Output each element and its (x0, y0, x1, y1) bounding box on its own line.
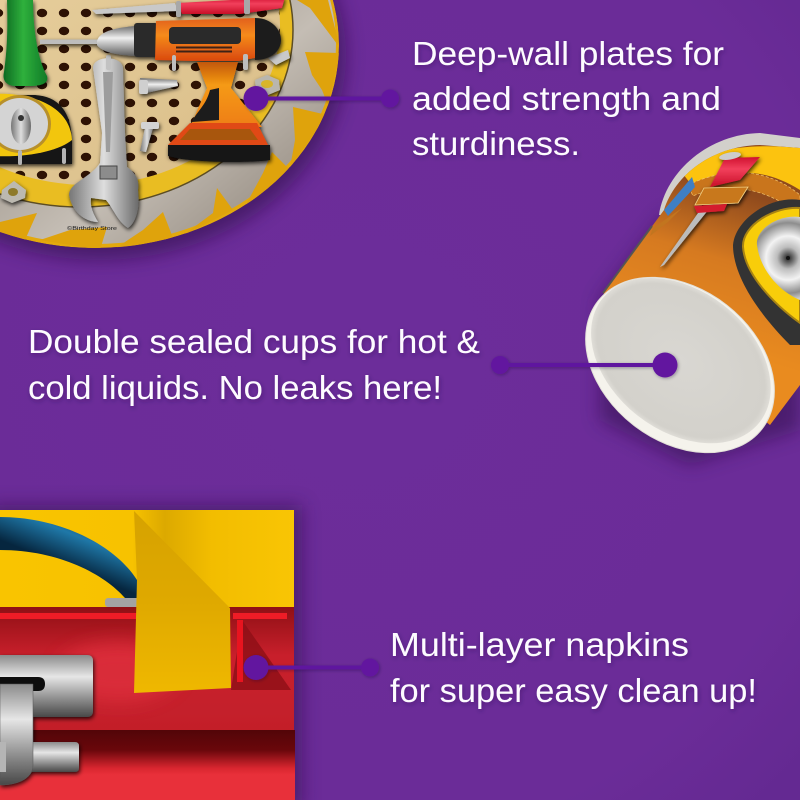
text: napkins feature: Multi-layer napkins (390, 626, 689, 663)
dark tape case (733, 199, 800, 345)
cup body (600, 130, 800, 430)
napkin folded corner (134, 511, 231, 693)
text: cups feature: cold liquids. No leaks here! (28, 369, 442, 406)
text: cups feature: Double sealed cups for hot & (28, 323, 480, 360)
red lid stripes (0, 613, 138, 619)
plate image: tools on a pegboard with a saw-blade border (0, 0, 346, 260)
blue hose (0, 517, 137, 598)
silver latch (0, 655, 93, 785)
text: plates feature: sturdiness. (412, 125, 580, 162)
text: napkins feature: for super easy clean up! (390, 672, 757, 709)
text: cups feature (28, 323, 480, 406)
napkin image: folded napkin with red toolbox print (0, 505, 302, 800)
callout: plates pointer line and dots (244, 86, 399, 111)
icon: green tool handle (4, 0, 47, 86)
inner yellow ring (0, 0, 293, 207)
saw blade ring (0, 0, 336, 244)
hex nuts and screws (1, 50, 290, 203)
copyright mark: ©Birthday Store (67, 225, 117, 232)
text: plates feature: Deep-wall plates for (412, 35, 724, 72)
cup base (551, 241, 800, 489)
yellow top area (0, 510, 294, 608)
text: plates feature (412, 35, 724, 162)
icon: adjustable wrench (69, 55, 139, 228)
hose fitting (105, 598, 138, 607)
pegboard (0, 0, 280, 185)
icon: screwdriver on cup (660, 151, 760, 267)
saw teeth (0, 0, 340, 250)
text: plates feature: added strength and (412, 80, 721, 117)
plate rim (0, 0, 339, 248)
icon: red screwdriver (92, 0, 285, 17)
red toolbox body (0, 607, 294, 800)
cup rim (659, 133, 800, 215)
cup image: tipped paper cup showing its base (585, 133, 800, 470)
pegboard holes (0, 0, 280, 185)
icon: orange power drill (40, 18, 281, 162)
cup left seam (603, 226, 652, 293)
yellow band (680, 146, 800, 190)
red toolbox dark band (0, 730, 295, 775)
napkin fold shadow triangle (231, 620, 291, 690)
text: napkins feature (390, 626, 757, 709)
callout: cups pointer line and dots (491, 352, 678, 378)
callout: napkins pointer line and dots (244, 655, 379, 680)
leather strap (691, 172, 800, 201)
icon: yellow tape measure (0, 94, 72, 165)
